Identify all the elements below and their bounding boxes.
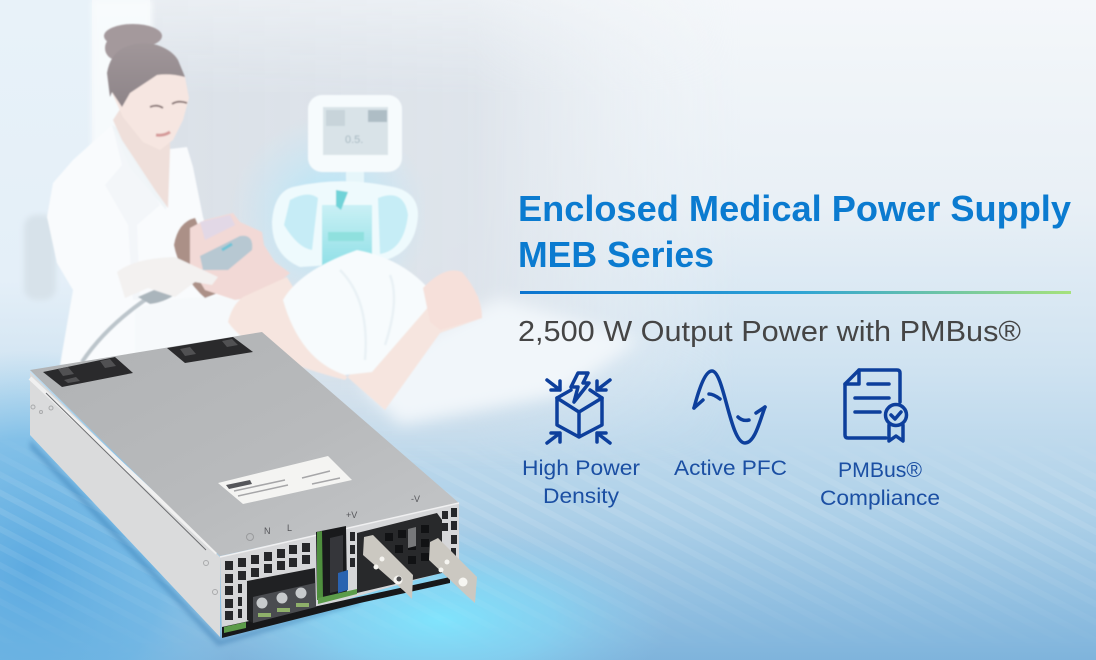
top connector left xyxy=(43,357,133,387)
top panel xyxy=(30,332,459,556)
terminal polarity marks: -V xyxy=(411,494,420,504)
hair xyxy=(107,43,185,107)
power supply unit xyxy=(30,332,477,646)
top connector right xyxy=(167,337,253,363)
subtitle: 2,500 W Output Power with PMBus® xyxy=(518,316,1021,348)
title: MEB Series xyxy=(518,234,714,275)
icon: active PFC waveform xyxy=(694,371,765,443)
terminal polarity marks: +V xyxy=(346,510,357,520)
photo: patient on treatment bed xyxy=(82,213,640,425)
feature label: PMBus compliance xyxy=(820,459,940,510)
terminal polarity marks: L xyxy=(287,523,292,533)
treatment handpiece xyxy=(200,236,252,270)
front panel xyxy=(220,503,459,638)
icon: high power density xyxy=(547,373,610,443)
lower front slot xyxy=(222,577,450,638)
bus bar left xyxy=(363,535,413,599)
gradient divider xyxy=(520,291,1071,294)
left side panel xyxy=(30,372,220,637)
coat xyxy=(47,125,235,365)
gloved hand xyxy=(117,257,218,298)
photo: aesthetic treatment machine xyxy=(225,95,425,310)
title: Enclosed Medical Power Supply xyxy=(518,188,1071,229)
photo: clinician in white coat xyxy=(47,24,235,365)
towel xyxy=(283,250,430,375)
feature label: high power density: High Power xyxy=(522,457,640,480)
terminal polarity marks: N xyxy=(264,526,270,536)
face xyxy=(112,65,189,150)
terminal polarity marks xyxy=(246,494,420,540)
feature label: high power density: Density xyxy=(543,485,620,508)
machine screen: 0.5. xyxy=(345,134,363,146)
machine body xyxy=(272,172,418,267)
feature label: high power density xyxy=(522,457,640,508)
feature label: PMBus compliance: Compliance xyxy=(820,487,940,510)
bus bar right xyxy=(429,538,477,603)
machine screen xyxy=(308,95,402,172)
icon: PMBus compliance document xyxy=(845,370,906,441)
bed sheet xyxy=(360,298,640,425)
drop shadow xyxy=(30,440,360,646)
terminal block xyxy=(247,568,316,623)
patient hands xyxy=(423,270,482,330)
pillow xyxy=(135,296,250,358)
hair bun xyxy=(104,24,162,60)
output vent housing xyxy=(357,513,442,593)
feature label: PMBus compliance: PMBus® xyxy=(838,459,923,482)
patient face and neck xyxy=(190,213,290,300)
patient hair xyxy=(174,218,225,298)
patient arm xyxy=(228,277,482,410)
feature label: active PFC: Active PFC xyxy=(674,457,787,480)
vent grid xyxy=(225,508,457,620)
neck and V-neck xyxy=(113,100,170,208)
label sticker xyxy=(218,456,352,504)
signal connector board xyxy=(224,526,357,633)
title xyxy=(518,188,1071,275)
